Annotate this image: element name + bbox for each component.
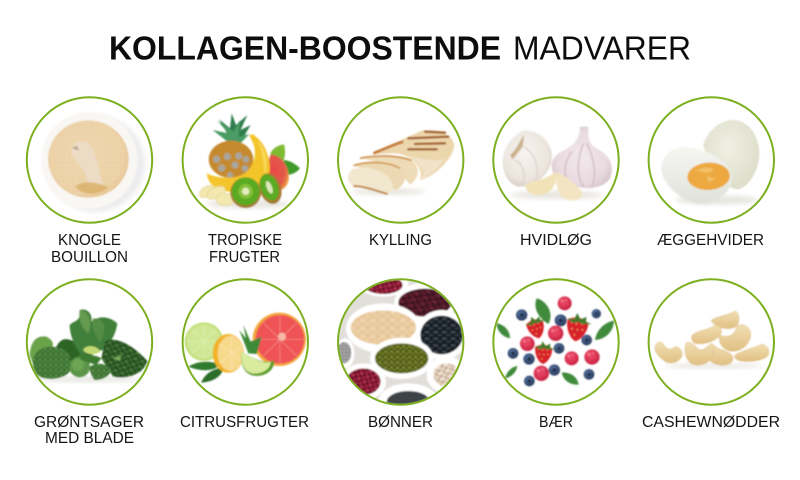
label: KNOGLE xyxy=(58,232,121,249)
panel: citrusfrugter xyxy=(180,279,309,431)
icon: bowl of bone broth xyxy=(41,112,145,212)
icon: leafy greens xyxy=(30,309,147,382)
icon: citrus fruits xyxy=(185,313,306,383)
circle outline xyxy=(27,279,152,405)
panel: knogle bouillon xyxy=(27,97,152,266)
icon: scattered berries xyxy=(497,296,614,386)
circle outline xyxy=(649,97,774,223)
label: CASHEWNØDDER xyxy=(642,414,780,431)
panel: grøntsager med blade xyxy=(27,279,152,447)
panel: cashewnødder xyxy=(642,279,780,431)
label: TROPISKE xyxy=(208,232,282,249)
title: KOLLAGEN-BOOSTENDE xyxy=(109,30,501,68)
panel: tropiske frugter xyxy=(183,97,308,266)
circle outline xyxy=(183,279,308,405)
icon: garlic bulbs and cloves xyxy=(503,127,612,200)
icon: bowls of beans xyxy=(339,280,462,404)
circle outline xyxy=(338,97,463,223)
circle outline xyxy=(649,279,774,405)
label: ÆGGEHVIDER xyxy=(657,232,764,249)
label: GRØNTSAGER xyxy=(34,414,144,431)
icon: tropical fruit pile xyxy=(197,113,300,209)
icon: boiled egg xyxy=(661,120,759,205)
panel: bær xyxy=(493,279,619,431)
label: HVIDLØG xyxy=(520,232,592,249)
title: MADVARER xyxy=(513,30,691,68)
label: MED BLADE xyxy=(45,430,134,447)
panel: bønner xyxy=(337,278,464,428)
icon: cashew nuts xyxy=(655,311,769,369)
icon: sliced grilled chicken xyxy=(348,130,454,195)
panel: hvidløg xyxy=(493,97,619,249)
label: BÆR xyxy=(539,414,573,431)
circle outline xyxy=(27,97,152,223)
label: CITRUSFRUGTER xyxy=(180,414,309,431)
label: BOUILLON xyxy=(51,249,128,266)
circle outline xyxy=(183,97,308,223)
label: KYLLING xyxy=(369,232,432,249)
circle outline xyxy=(338,279,463,405)
circle outline xyxy=(493,279,619,405)
circle outline xyxy=(493,97,619,223)
panel: kylling xyxy=(338,97,463,249)
panel: æggehvider xyxy=(649,97,774,249)
label: FRUGTER xyxy=(209,249,280,266)
label: BØNNER xyxy=(368,414,433,431)
